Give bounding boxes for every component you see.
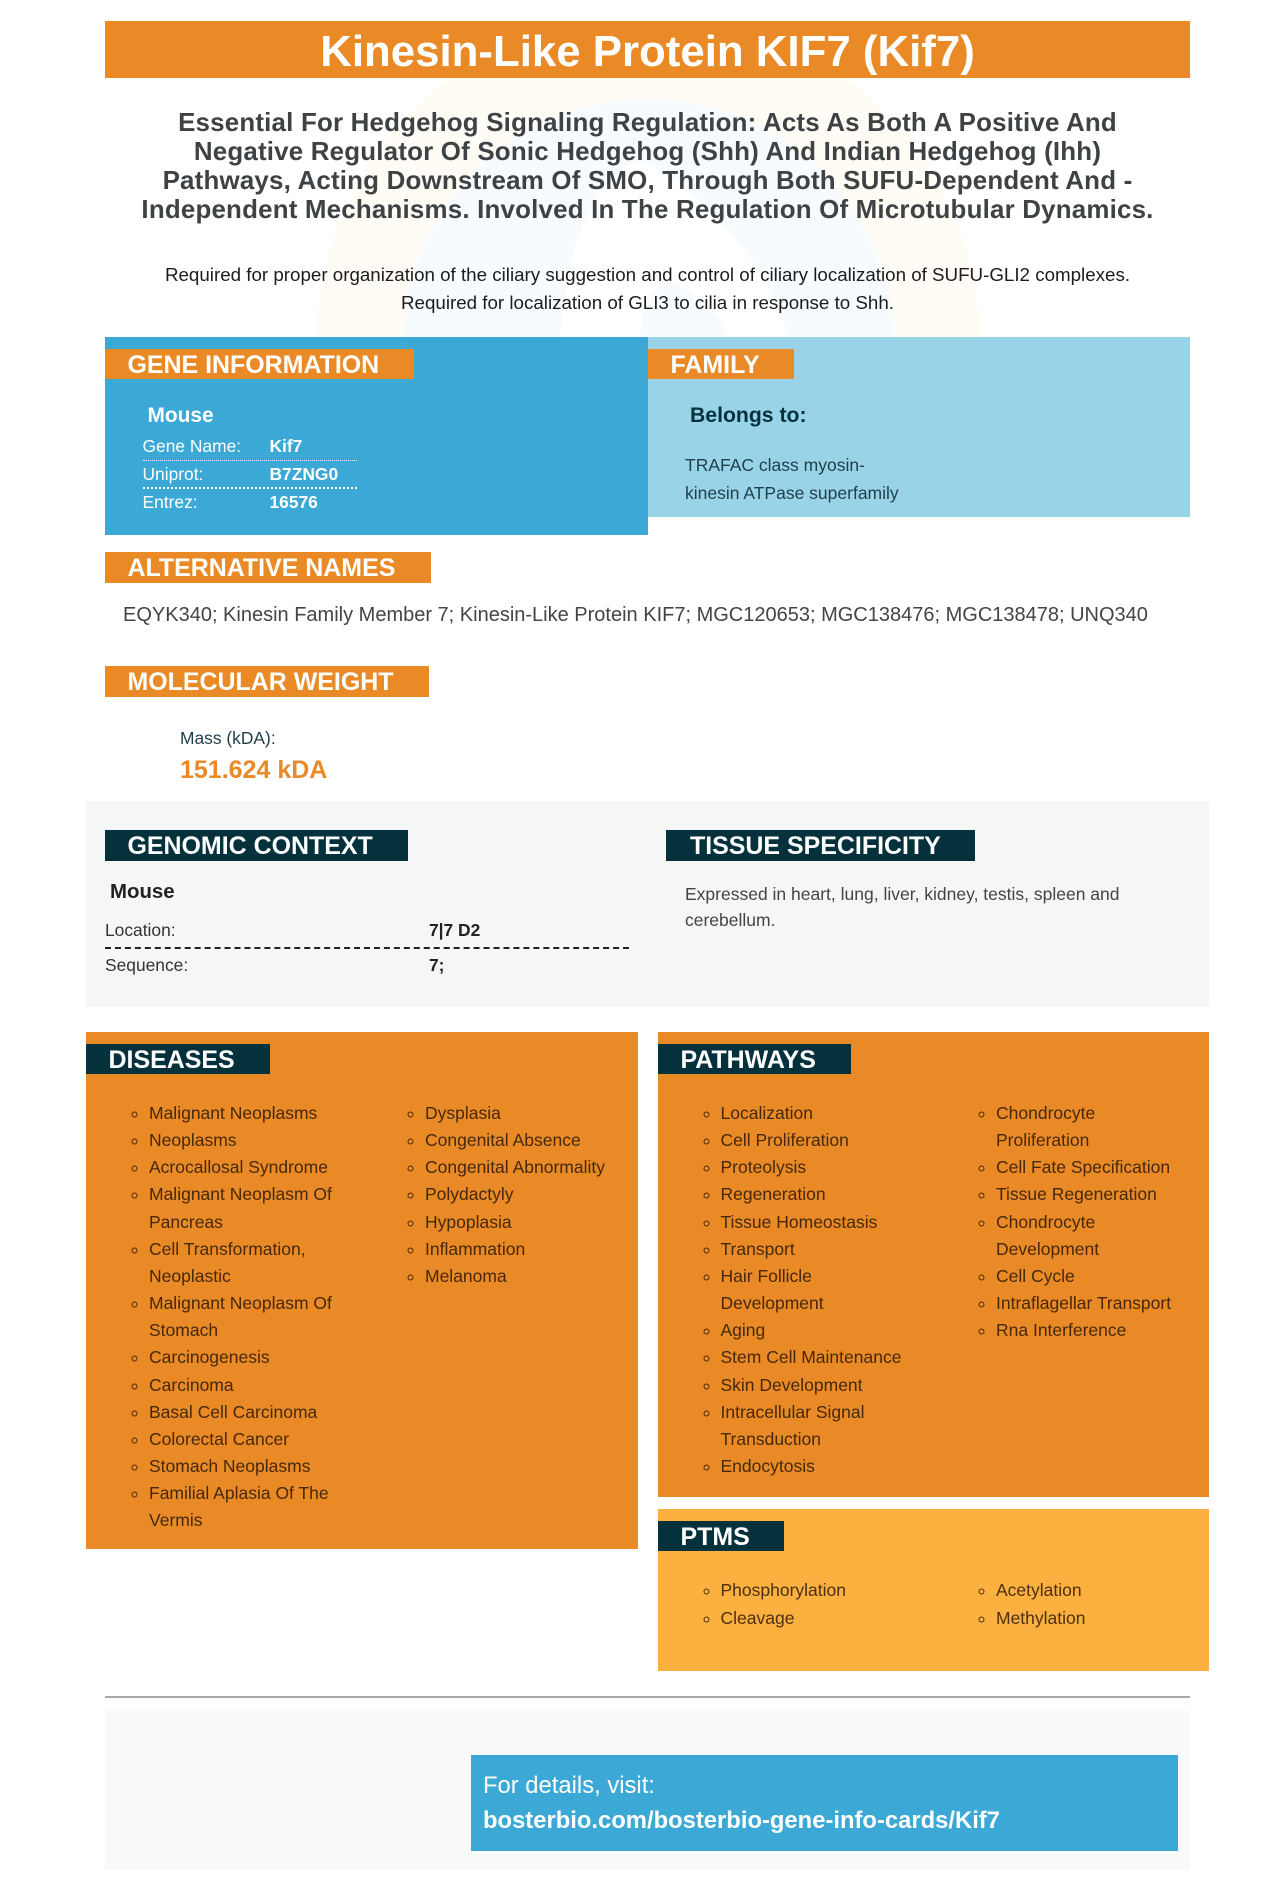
pathways list column 1: Proteolysis: [720, 1157, 806, 1177]
subtitle: Independent Mechanisms. Involved In The Regulation Of Microtubular Dynamics.: [141, 196, 1154, 224]
panel: footer: [105, 1711, 1190, 1870]
function description: Required for localization of GLI3 to cilia in response to Shh.: [401, 292, 894, 313]
mass value: 151.624 kDA: [180, 756, 327, 784]
pathways list column 1: Regeneration: [720, 1184, 826, 1204]
tissue specificity text: Expressed in heart, lung, liver, kidney, testis, spleen and: [685, 884, 1120, 904]
pathways list column 1: Stem Cell Maintenance: [720, 1347, 901, 1367]
diseases list column 1: Colorectal Cancer: [149, 1429, 289, 1449]
callout: details link: [471, 1755, 1178, 1851]
pathways list column 1: Endocytosis: [720, 1456, 815, 1476]
uniprot label: Uniprot:: [142, 464, 203, 484]
gene name value: Kif7: [270, 436, 302, 456]
pathways list column 2: Development: [996, 1239, 1099, 1259]
uniprot value: B7ZNG0: [270, 464, 338, 484]
heading: tissue specificity: TISSUE SPECIFICITY: [690, 832, 941, 860]
diseases list column 1: Vermis: [149, 1510, 202, 1530]
sequence value: 7;: [429, 955, 444, 975]
pathways list column 2: Intraflagellar Transport: [996, 1293, 1171, 1313]
diseases list column 1: Neoplasms: [149, 1130, 237, 1150]
diseases list column 2: Dysplasia: [425, 1103, 501, 1123]
diseases list column 1: Basal Cell Carcinoma: [149, 1402, 317, 1422]
diseases list column 2: Polydactyly: [425, 1184, 514, 1204]
diseases list column 2: Inflammation: [425, 1239, 525, 1259]
species label: Mouse: [148, 404, 214, 426]
panel: diseases: [86, 1032, 638, 1549]
diseases list column 1: Familial Aplasia Of The: [149, 1483, 329, 1503]
genomic species label: Mouse: [110, 881, 175, 903]
pathways list column 2: Rna Interference: [996, 1320, 1126, 1340]
family description: [685, 455, 899, 503]
diseases list column 2: [408, 1103, 605, 1286]
diseases list column 2: Congenital Abnormality: [425, 1157, 605, 1177]
panel: genomic context and tissue specificity: [86, 801, 1209, 1007]
heading: pathways: PATHWAYS: [680, 1046, 816, 1074]
diseases list column 1: Cell Transformation,: [149, 1239, 306, 1259]
diseases list column 1: Acrocallosal Syndrome: [149, 1157, 328, 1177]
pathways list column 1: Cell Proliferation: [720, 1130, 849, 1150]
heading: PTMs: PTMS: [680, 1523, 750, 1551]
heading: gene information: GENE INFORMATION: [128, 351, 379, 379]
diseases list column 1: Pancreas: [149, 1212, 223, 1232]
subtitle: Essential For Hedgehog Signaling Regulation: Acts As Both A Positive And: [178, 109, 1117, 137]
gene name label: Gene Name:: [142, 436, 241, 456]
gene data table: [142, 436, 357, 512]
subtitle: Negative Regulator Of Sonic Hedgehog (Shh) And Indian Hedgehog (Ihh): [194, 138, 1101, 166]
heading: molecular weight: MOLECULAR WEIGHT: [128, 668, 393, 696]
subtitle: [141, 109, 1154, 224]
entrez label: Entrez:: [142, 492, 198, 512]
diseases list column 1: Carcinoma: [149, 1375, 234, 1395]
details label: For details, visit:: [483, 1772, 655, 1798]
pathways list column 2: Chondrocyte: [996, 1212, 1095, 1232]
heading: pathways: [658, 1044, 851, 1074]
subtitle: Pathways, Acting Downstream Of SMO, Through Both SUFU-Dependent And -: [163, 167, 1132, 195]
pathways list column 1: Tissue Homeostasis: [720, 1212, 877, 1232]
PTMs list column 2: Methylation: [996, 1608, 1086, 1628]
diseases list column 2: Hypoplasia: [425, 1212, 512, 1232]
title banner: Kinesin-Like Protein KIF7 (Kif7): [320, 27, 975, 76]
pathways list column 1: Transport: [720, 1239, 795, 1259]
pathways list column 2: Tissue Regeneration: [996, 1184, 1157, 1204]
pathways list column 1: Transduction: [720, 1429, 821, 1449]
PTMs list column 1: [704, 1580, 846, 1628]
diseases list column 1: Neoplastic: [149, 1266, 231, 1286]
heading: family: [648, 349, 794, 379]
diseases list column 1: Carcinogenesis: [149, 1347, 270, 1367]
title banner: [105, 21, 1190, 78]
alternative names text: EQYK340; Kinesin Family Member 7; Kinesin-Like Protein KIF7; MGC120653; MGC138476; MGC138478; UNQ340: [123, 604, 1148, 626]
diseases list column 2: Congenital Absence: [425, 1130, 581, 1150]
pathways list column 2: Cell Cycle: [996, 1266, 1075, 1286]
heading: diseases: [86, 1044, 270, 1074]
PTMs list column 2: Acetylation: [996, 1580, 1082, 1600]
pathways list column 1: [704, 1103, 901, 1476]
tissue specificity text: cerebellum.: [685, 910, 775, 930]
function description: Required for proper organization of the ciliary suggestion and control of ciliary localization of SUFU-GLI2 complexes.: [165, 264, 1130, 285]
panel: pathways: [658, 1032, 1209, 1497]
pathways list column 2: Chondrocyte: [996, 1103, 1095, 1123]
pathways list column 1: Intracellular Signal: [720, 1402, 864, 1422]
diseases list column 1: Malignant Neoplasm Of: [149, 1184, 332, 1204]
heading: family: FAMILY: [670, 351, 760, 379]
heading: diseases: DISEASES: [108, 1046, 235, 1074]
pathways list column 1: Aging: [720, 1320, 765, 1340]
heading: PTMs: [658, 1521, 784, 1551]
diseases list column 2: Melanoma: [425, 1266, 507, 1286]
background watermark logo: [316, 78, 980, 337]
panel: gene information: [105, 337, 648, 535]
PTMs list column 1: Cleavage: [720, 1608, 794, 1628]
tissue specificity text: [685, 884, 1120, 930]
belongs to label: Belongs to:: [690, 404, 807, 426]
heading: alternative names: ALTERNATIVE NAMES: [128, 554, 395, 582]
panel: family: [648, 337, 1190, 517]
pathways list column 2: [978, 1103, 1171, 1340]
pathways list column 1: Hair Follicle: [720, 1266, 812, 1286]
mass label: Mass (kDA):: [180, 728, 276, 748]
pathways list column 2: Cell Fate Specification: [996, 1157, 1170, 1177]
family description: TRAFAC class myosin-: [685, 455, 865, 475]
diseases list column 1: [132, 1103, 332, 1530]
function description: [165, 264, 1130, 313]
diseases list column 1: Malignant Neoplasms: [149, 1103, 317, 1123]
PTMs list column 1: Phosphorylation: [720, 1580, 846, 1600]
diseases list column 1: Malignant Neoplasm Of: [149, 1293, 332, 1313]
details url: bosterbio.com/bosterbio-gene-info-cards/Kif7: [483, 1807, 1000, 1834]
sequence label: Sequence:: [105, 955, 188, 975]
pathways list column 1: Skin Development: [720, 1375, 863, 1395]
pathways list column 2: Proliferation: [996, 1130, 1089, 1150]
location label: Location:: [105, 920, 176, 940]
pathways list column 1: Localization: [720, 1103, 813, 1123]
heading: genomic context: GENOMIC CONTEXT: [128, 832, 373, 860]
diseases list column 1: Stomach: [149, 1320, 218, 1340]
pathways list column 1: Development: [720, 1293, 824, 1313]
PTMs list column 2: [978, 1580, 1086, 1628]
diseases list column 1: Stomach Neoplasms: [149, 1456, 310, 1476]
panel: PTMs: [658, 1509, 1209, 1671]
entrez value: 16576: [270, 492, 318, 512]
location value: 7|7 D2: [429, 920, 480, 940]
family description: kinesin ATPase superfamily: [685, 483, 899, 503]
